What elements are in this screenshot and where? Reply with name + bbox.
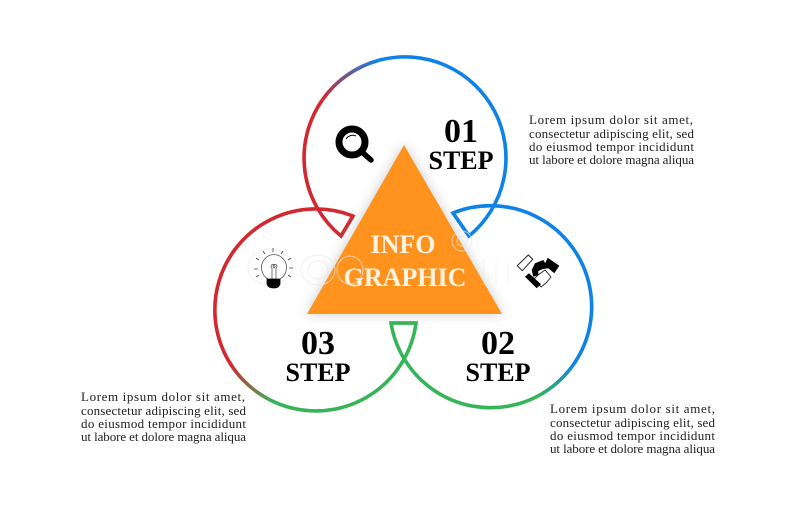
- circle: step 01 outline: [304, 57, 506, 236]
- icon: magnifying glass: [339, 129, 371, 160]
- text block: step 01: consectetur adipiscing elit, sed: [529, 126, 694, 141]
- central orange triangle: [307, 145, 502, 314]
- text block: step 01: [529, 112, 694, 167]
- step 03 label: [285, 325, 351, 387]
- triangle label: [344, 230, 466, 292]
- text block: step 02: Lorem ipsum dolor sit amet,: [550, 401, 715, 416]
- step 03 label: STEP: [285, 358, 351, 387]
- triangle label: GRAPHIC: [344, 263, 466, 292]
- text block: step 03: do eiusmod tempor incididunt: [81, 416, 246, 431]
- text block: step 01: do eiusmod tempor incididunt: [529, 139, 694, 154]
- step 01 label: 01: [444, 113, 478, 150]
- text block: step 03: [81, 389, 246, 444]
- circle: step 02 outline: [391, 206, 592, 408]
- text block: step 02: do eiusmod tempor incididunt: [550, 428, 715, 443]
- text block: step 03: Lorem ipsum dolor sit amet,: [81, 389, 245, 404]
- icon: handshake: [517, 255, 559, 288]
- watermark: [248, 231, 508, 285]
- text block: step 02: ut labore et dolore magna aliqua: [550, 441, 715, 456]
- icon: light bulb: [254, 248, 293, 288]
- circle: step 03 outline: [215, 209, 416, 411]
- step 02 label: [465, 325, 531, 387]
- triangle shadow: [307, 145, 502, 314]
- step 01 label: [428, 113, 494, 175]
- step 01 label: STEP: [428, 146, 494, 175]
- step 02 label: STEP: [465, 358, 531, 387]
- text block: step 02: consectetur adipiscing elit, sed: [550, 415, 716, 430]
- step 03 label: 03: [301, 325, 335, 362]
- text block: step 01: ut labore et dolore magna aliqua: [529, 152, 694, 167]
- text block: step 03: consectetur adipiscing elit, sed: [81, 403, 246, 418]
- step 02 label: 02: [481, 325, 515, 362]
- text block: step 02: [550, 401, 716, 456]
- text block: step 01: Lorem ipsum dolor sit amet,: [529, 112, 693, 127]
- triangle label: INFO: [370, 230, 436, 259]
- text block: step 03: ut labore et dolore magna aliqua: [81, 429, 246, 444]
